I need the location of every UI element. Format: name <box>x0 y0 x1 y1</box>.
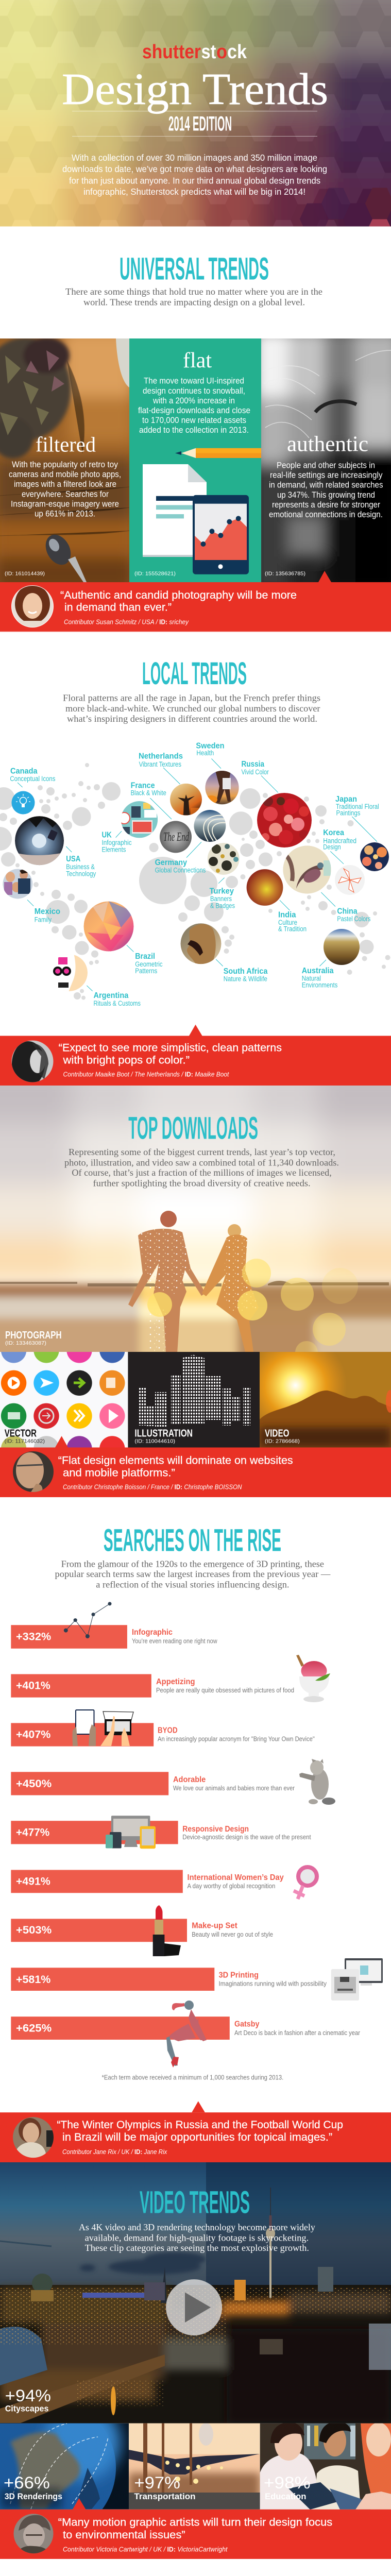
icon: kitten <box>299 1759 335 1805</box>
avatar: Susan Schmitz <box>11 585 54 628</box>
panel: authentic: People and other subjects in <box>277 461 375 470</box>
country: France: The End <box>163 831 190 844</box>
icon: venus symbol <box>294 1867 317 1899</box>
panel: flat: with a 200% increase in <box>152 396 235 405</box>
country: China: China <box>337 907 358 916</box>
intro text: downloads to date, we’ve got more data on what designers are looking <box>62 164 327 174</box>
logo: shutterstock: ck <box>227 41 247 63</box>
avatar: Maaike Boot <box>11 1041 54 1082</box>
country: India: Culture <box>278 919 297 926</box>
panel: video: VIDEO <box>265 1428 290 1439</box>
country: France: France <box>131 781 155 790</box>
icon: line chart <box>64 1602 111 1638</box>
text: Searches intro <box>55 1558 331 1590</box>
country: Russia <box>241 760 312 848</box>
country: USA: Business & <box>66 863 95 871</box>
bar: Make-up Set +503%: Make-up Set <box>192 1922 237 1930</box>
quote: Maaike Boot: Contributor Maaike Boot / The Netherlands / ID: Maaike Boot <box>63 1071 230 1078</box>
bar: Adorable +450% <box>11 1759 335 1805</box>
panel: 3D renderings video: 3D Renderings <box>5 2492 62 2501</box>
quote: Susan Schmitz: “Authentic and candid photography will be more <box>60 589 297 601</box>
country: Canada <box>10 767 56 814</box>
intro text <box>62 152 327 197</box>
panel: top downloads background photo <box>0 1086 391 1352</box>
quote: Victoria Cartwright: to environmental issues” <box>63 2529 185 2541</box>
country: USA: Technology <box>66 870 96 878</box>
country: Germany: Global Connections <box>155 867 206 874</box>
panel: education video: +98% <box>264 2473 311 2492</box>
bar: BYOD +407%: An increasingly popular acronym for "Bring Your Own Device" <box>158 1735 315 1743</box>
bar: 3D Printing +581%: +581% <box>16 1974 51 1986</box>
intro text: With a collection of over 30 million images and 350 million image <box>72 152 317 163</box>
text: Video Trends intro <box>79 2222 315 2253</box>
panel: education video: Education <box>265 2492 306 2501</box>
country: Japan: Traditional Floral <box>336 803 379 810</box>
title: Design Trends: Design Trends <box>62 64 328 114</box>
panel: vector: VECTOR <box>5 1428 37 1439</box>
country: Russia: Russia <box>241 760 264 769</box>
panel: top downloads background photo: (ID: 133463087) <box>5 1340 46 1346</box>
logo: shutterstock: shutter <box>142 41 201 63</box>
stat: Cityscapes +94%: +94% <box>5 2386 51 2405</box>
panel: top downloads background photo: PHOTOGRAPH <box>5 1330 62 1341</box>
country: Japan: Japan <box>335 795 357 804</box>
bar: BYOD +407%: +407% <box>16 1729 51 1740</box>
country: Canada: Canada <box>10 767 38 776</box>
text: Top Downloads intro <box>64 1147 339 1188</box>
decorative dot field <box>0 763 390 1000</box>
panel: filtered: cameras and mobile photo apps, <box>9 469 121 479</box>
panel: flat: flat <box>183 349 212 372</box>
quote: Christophe Boisson: Contributor Christophe Boisson / France / ID: Christophe BOISSON <box>63 1483 242 1491</box>
text: Local Trends intro: Floral patterns are all the rage in Japan, but the French prefer things <box>63 693 320 703</box>
panel: transportation video <box>129 2423 260 2510</box>
quote: Jane Rix: in Brazil will be major opportunities for topical images.” <box>62 2131 332 2143</box>
bar: Gatsby +625% <box>11 2001 361 2067</box>
bar: Appetizing +401%: People are really quite obsessed with pictures of food <box>156 1686 294 1694</box>
panel: filtered: images with a filtered look are <box>14 479 116 489</box>
text: Searches intro: popular search terms saw the largest increases from the previous year — <box>55 1569 331 1579</box>
text: Top Downloads intro: photo, illustration, and video saw a combined total of 11,340 downloads. <box>64 1157 339 1167</box>
country: UK: Elements <box>102 846 126 853</box>
country: Turkey: Banners <box>210 895 232 903</box>
stat: Cityscapes +94% <box>5 2386 51 2413</box>
country: France <box>131 781 192 853</box>
quote: Victoria Cartwright <box>0 2498 391 2559</box>
panel: flat: added to the collection in 2013. <box>139 425 249 435</box>
bar: International Women's Day +491%: A day worthy of global recognition <box>188 1882 275 1890</box>
country: Australia: Environments <box>302 981 338 989</box>
panel: filtered: up 661% in 2013. <box>35 509 95 519</box>
text: Searches intro: a reflection of the visual stories influencing design. <box>96 1580 290 1590</box>
text: Video Trends intro: available, demand for high-quality footage is skyrocketing. <box>85 2232 309 2243</box>
country: Argentina <box>49 953 141 1007</box>
quote: Christophe Boisson: “Flat design elements will dominate on websites <box>58 1454 293 1466</box>
country: India <box>247 869 307 933</box>
icon: document <box>143 464 207 557</box>
bar: 3D Printing +581%: 3D Printing <box>218 1971 259 1979</box>
country: France: Black & White <box>131 789 166 797</box>
country: Argentina: Rituals & Customs <box>94 999 141 1007</box>
country: Turkey <box>208 843 240 910</box>
icon: pencil <box>175 448 261 458</box>
panel: 3D renderings video <box>0 2424 129 2510</box>
panel: video: (ID: 2786668) <box>265 1438 300 1445</box>
panel: flat: to 170,000 new related assets <box>142 415 246 425</box>
text: Universal Trends intro: world. These trends are impacting design on a global level. <box>83 297 305 307</box>
icon: Gatsby flapper <box>166 2001 207 2067</box>
country: Sweden <box>196 742 239 804</box>
avatar: Jane Rix <box>13 2117 54 2158</box>
country: Mexico: Family <box>35 916 52 923</box>
bar: Appetizing +401%: Appetizing <box>156 1677 195 1686</box>
stat: Cityscapes +94%: Cityscapes <box>5 2403 48 2413</box>
country: Brazil: Brazil <box>135 952 155 961</box>
avatar: Christophe Boisson <box>13 1451 54 1492</box>
bar: Infographic +332% <box>11 1602 217 1649</box>
country: Sweden: Sweden <box>196 742 225 751</box>
icon: play button <box>166 2279 222 2335</box>
panel: filtered: Instagram-esque imagery were <box>11 499 119 509</box>
logo: shutterstock: o <box>216 41 227 63</box>
country: India: & Tradition <box>278 925 307 933</box>
country: Australia: Natural <box>302 975 321 982</box>
quote: Victoria Cartwright: “Many motion graphic artists will turn their design focus <box>58 2517 332 2529</box>
panel: vector <box>1 1352 125 1448</box>
country: UK: UK <box>102 831 112 840</box>
intro text: for than just about anyone. In our third annual global design trends <box>69 175 320 185</box>
panel: authentic: up 347%. This growing trend <box>277 490 375 500</box>
bar: Infographic +332%: Infographic <box>132 1628 173 1637</box>
panel: authentic: (ID: 135636785) <box>265 571 305 577</box>
country: India: India <box>278 911 296 920</box>
bar: BYOD +407%: BYOD <box>158 1726 178 1735</box>
country: South Africa: South Africa <box>224 967 268 976</box>
quote: Susan Schmitz <box>0 582 391 632</box>
country: China: Pastel Colors <box>337 915 370 923</box>
panel: filtered: (ID: 161014439) <box>5 571 45 577</box>
panel: illustration: ILLUSTRATION <box>134 1428 193 1439</box>
country: Australia <box>302 929 360 989</box>
country: Brazil <box>83 901 163 975</box>
icon: ice cream <box>296 1655 330 1702</box>
country: USA <box>15 812 96 878</box>
text: Top Downloads intro: further spotlighting the broad diversity of creative needs. <box>93 1178 311 1188</box>
country: South Africa: Nature & Wildlife <box>224 975 267 983</box>
bar: Gatsby +625%: Art Deco is back in fashion after a cinematic year <box>234 2029 361 2037</box>
country: Japan <box>335 795 389 871</box>
bar: Make-up Set +503%: +503% <box>16 1924 52 1936</box>
subtitle: 2014 Edition: 2014 EDITION <box>168 112 232 135</box>
panel: authentic: authentic <box>287 433 368 456</box>
bar: International Women's Day +491%: International Women’s Day <box>188 1873 284 1882</box>
country: Sweden: Health <box>196 749 214 757</box>
panel: flat: flat-design downloads and close <box>138 405 250 415</box>
panel: flat: (ID: 155528621) <box>134 571 176 577</box>
quote: Susan Schmitz: Contributor Susan Schmitz / USA / ID: srichey <box>64 618 189 625</box>
country: UK <box>102 801 158 853</box>
bar: International Women's Day +491% <box>11 1867 317 1899</box>
intro text: infographic, Shutterstock predicts what will be big in 2014! <box>83 187 305 197</box>
country: Russia: Vivid Color <box>241 768 269 776</box>
bar: 3D Printing +581% <box>11 1958 383 2001</box>
footnote: *Each term above received a minimum of 1,000 searches during 2013. <box>102 2073 283 2081</box>
quote: Jane Rix: Contributor Jane Rix / UK / ID: Jane Rix <box>62 2148 167 2156</box>
country: Netherlands: Netherlands <box>139 752 183 760</box>
bar: Adorable +450%: +450% <box>16 1778 52 1790</box>
bar: Appetizing +401%: +401% <box>16 1680 50 1692</box>
quote: Maaike Boot <box>0 1025 391 1087</box>
country: Canada: Conceptual Icons <box>10 775 56 783</box>
panel: flat: The move toward UI-inspired <box>144 376 244 386</box>
panel: flat: design continues to snowball, <box>143 386 245 396</box>
quote: Maaike Boot: with bright pops of color.” <box>62 1054 190 1066</box>
panel: filtered <box>0 338 129 582</box>
country: Korea <box>323 828 365 895</box>
country: Germany: Germany <box>155 858 187 867</box>
text: Local Trends intro <box>63 693 320 724</box>
avatar: Victoria Cartwright <box>13 2514 54 2553</box>
panel: filtered: everywhere. Searches for <box>22 489 109 499</box>
panel: video trends city photo <box>0 2162 391 2424</box>
icon: tablet and laptop with hands <box>73 1710 133 1746</box>
illustration: city skyline <box>139 1355 250 1427</box>
icon: phone with chart <box>193 495 249 574</box>
country: Germany <box>155 810 226 874</box>
country: China <box>283 845 370 923</box>
panel: vector: (ID: 117146032) <box>5 1438 45 1445</box>
text: Universal Trends intro <box>65 286 322 307</box>
bar: Infographic +332%: +332% <box>16 1631 52 1643</box>
country: Turkey: Turkey <box>210 887 234 896</box>
panel: 3D renderings video: +66% <box>4 2473 50 2492</box>
infographic canvas: VIDEO TRENDS <box>140 2185 250 2220</box>
bar: Make-up Set +503% <box>11 1905 273 1956</box>
bar: 3D Printing +581%: Imaginations running wild with possibility <box>218 1979 327 1988</box>
quote: Victoria Cartwright: Contributor Victoria Cartwright / UK / ID: VictoriaCartwright <box>63 2545 228 2553</box>
icon: responsive devices <box>106 1816 156 1849</box>
text: Top Downloads intro: Of course, that’s just a fraction of the millions of images we licensed, <box>72 1167 332 1178</box>
country: Netherlands <box>139 752 202 817</box>
bar: Responsive Design +477%: Device-agnostic design is the wave of the present <box>182 1833 311 1841</box>
panel: filtered: With the popularity of retro toy <box>12 460 118 469</box>
bar: Responsive Design +477% <box>11 1816 311 1849</box>
panel: authentic: represents a desire for stronger <box>272 500 380 510</box>
bar: Infographic +332%: You’re even reading one right now <box>132 1637 217 1645</box>
panel: transportation video: Transportation <box>134 2492 196 2501</box>
bar: Adorable +450%: Adorable <box>173 1775 206 1784</box>
quote: Jane Rix: “The Winter Olympics in Russia and the Football World Cup <box>57 2119 343 2131</box>
country: Korea: Handcrafted <box>323 837 356 844</box>
icon: lipstick <box>153 1905 181 1956</box>
country: South Africa <box>180 923 268 983</box>
quote: Maaike Boot: “Expect to see more simplistic, clean patterns <box>59 1042 282 1054</box>
quote: Susan Schmitz: in demand than ever.” <box>64 602 172 613</box>
country: Argentina: Argentina <box>94 991 129 1000</box>
logo: shutterstock <box>142 41 247 63</box>
text: Local Trends intro: what’s inspiring designers in different countries around the world. <box>67 714 317 724</box>
panel: education video <box>260 2421 391 2510</box>
panel: hero header <box>0 0 391 227</box>
quote: Jane Rix <box>0 2101 391 2162</box>
text: Video Trends intro: As 4K video and 3D rendering technology become more widely <box>79 2222 315 2232</box>
country: Brazil: Patterns <box>135 967 158 975</box>
panel: illustration <box>128 1352 260 1448</box>
bar: Make-up Set +503%: Beauty will never go out of style <box>192 1930 273 1938</box>
bar: Appetizing +401% <box>11 1655 330 1702</box>
icon: 3D printer and monitor <box>331 1958 383 2001</box>
panel: authentic <box>261 338 391 582</box>
panel: video <box>260 1352 391 1448</box>
country: Mexico: Mexico <box>35 907 60 916</box>
photo subject: couple <box>128 1211 259 1353</box>
panel: filtered: filtered <box>36 432 96 456</box>
country: Mexico <box>3 869 60 923</box>
text: Video Trends intro: These clip categories are seeing the most explosive growth. <box>85 2243 309 2253</box>
quote: Christophe Boisson: and mobile platforms.” <box>63 1467 175 1479</box>
quote: Christophe Boisson <box>0 1436 391 1497</box>
country: Brazil: Geometric <box>135 960 163 968</box>
text: Local Trends intro: more black-and-white. We crunched our global numbers to discover <box>65 703 320 714</box>
infographic canvas: LOCAL TRENDS <box>142 656 247 691</box>
panel: illustration: (ID: 110044610) <box>134 1438 175 1445</box>
country: USA: USA <box>66 855 80 863</box>
country: Australia: Australia <box>302 967 334 975</box>
text: Universal Trends intro: There are some things that hold true no matter where you are in the <box>65 286 322 297</box>
country: Netherlands: Vibrant Textures <box>139 760 181 768</box>
country: Korea: Korea <box>323 828 344 837</box>
text: Searches intro: From the glamour of the 1920s to the emergence of 3D printing, these <box>61 1558 324 1569</box>
bar: BYOD +407% <box>11 1710 315 1747</box>
panel: transportation video: +97% <box>134 2473 180 2492</box>
country: Turkey: & Badges <box>210 902 235 910</box>
country: Japan: Paintings <box>336 809 361 817</box>
logo: shutterstock: st <box>201 41 216 63</box>
text: Top Downloads intro: Representing some of the biggest current trends, last year’s top vector, <box>69 1147 335 1157</box>
bar: Adorable +450%: We love our animals and babies more than ever <box>173 1784 295 1792</box>
bar: Responsive Design +477%: +477% <box>16 1826 50 1838</box>
bar: Gatsby +625%: Gatsby <box>234 2020 259 2029</box>
bar: Gatsby +625%: +625% <box>16 2023 52 2035</box>
panel: flat <box>129 338 261 582</box>
country: UK: Infographic <box>102 839 132 846</box>
country: Korea: Design <box>323 843 341 851</box>
bar: International Women's Day +491%: +491% <box>16 1876 50 1888</box>
bar: Responsive Design +477%: Responsive Design <box>182 1825 249 1834</box>
